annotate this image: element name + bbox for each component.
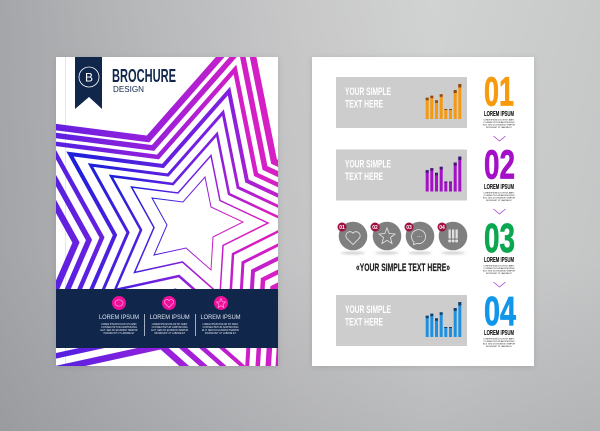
icon: speech bubble: 03 [406, 225, 412, 231]
column 2: CONSECTETUR ADIPISICING [152, 326, 188, 329]
icon row [338, 222, 467, 254]
icon: speech bubble [404, 222, 434, 250]
step 03: LOREM IPSUM [484, 257, 514, 264]
step 04: CONSECTETUR ADIPISICING [484, 340, 515, 343]
caption: «YOUR SIMPLE TEXT HERE» [356, 262, 450, 274]
step 04: LOREM IPSUM DOLOR SIT AMET, [484, 338, 515, 340]
card 4 with blue bar chart: YOUR SIMPLE [345, 304, 391, 316]
column 2: LOREM IPSUM DOLOR SIT AMET, [152, 323, 188, 326]
ribbon with B logo: B [85, 70, 93, 84]
step 03: ELIT, SED DO EIUSMOD TEMPOR [483, 270, 515, 272]
column 3: INCIDIDUNT UT LABORE ET [205, 332, 237, 335]
column 2: ELIT, SED DO EIUSMOD TEMPOR [151, 329, 188, 332]
ribbon with B logo [75, 57, 102, 109]
column 2: LOREM IPSUM [150, 315, 190, 321]
step 01: ELIT, SED DO EIUSMOD TEMPOR [483, 124, 515, 126]
column 3 [200, 296, 240, 335]
column 1: CONSECTETUR ADIPISICING [101, 326, 137, 329]
step 01 [483, 68, 515, 129]
step 02: 02 [484, 142, 515, 188]
icon: binders: 04 [439, 225, 445, 231]
step 03: 03 [484, 215, 515, 261]
card 1 with orange bar chart [336, 77, 467, 128]
step 03: CONSECTETUR ADIPISICING [484, 267, 515, 270]
step 04: ELIT, SED DO EIUSMOD TEMPOR [483, 344, 515, 346]
step 01: 01 [484, 68, 514, 114]
step 02: CONSECTETUR ADIPISICING [484, 194, 515, 197]
info band [56, 289, 278, 348]
card 2 with purple bar chart [336, 150, 467, 200]
column 1 [99, 296, 139, 335]
card 2 with purple bar chart: TEXT HERE [345, 171, 383, 183]
panel: inner page [312, 57, 534, 367]
step 04: LOREM IPSUM [484, 330, 514, 337]
card 4 with blue bar chart [336, 295, 467, 346]
icon: star: 02 [372, 225, 378, 231]
step 02: INCIDIDUNT UT LABORE ET [486, 199, 513, 202]
icon: speech bubble: ... [417, 233, 422, 239]
column 2 [150, 296, 190, 335]
column 1: INCIDIDUNT UT LABORE ET [104, 332, 135, 335]
step 02 [483, 142, 515, 202]
subheading: design: DESIGN [113, 85, 144, 94]
column 2: INCIDIDUNT UT LABORE ET [154, 332, 186, 335]
column 3: LOREM IPSUM DOLOR SIT AMET, [202, 323, 239, 326]
arrow 2 [494, 209, 506, 214]
column 1: LOREM IPSUM DOLOR SIT AMET, [101, 323, 137, 326]
star line pattern [56, 57, 278, 366]
step 01: CONSECTETUR ADIPISICING [484, 121, 515, 124]
column 3: ELIT, SED DO EIUSMOD TEMPOR [202, 329, 239, 332]
card 4 with blue bar chart: TEXT HERE [345, 316, 383, 328]
column 3: LOREM IPSUM [200, 315, 240, 321]
heading: brochure: BROCHURE [112, 66, 176, 86]
column 3: CONSECTETUR ADIPISICING [202, 326, 239, 329]
icon: heart: 01 [339, 225, 345, 231]
arrow 1 [494, 136, 506, 141]
card 1 with orange bar chart: YOUR SIMPLE [345, 86, 391, 98]
step 02: ELIT, SED DO EIUSMOD TEMPOR [483, 198, 515, 200]
panel: brochure cover [56, 56, 279, 368]
card 2 with purple bar chart: YOUR SIMPLE [345, 158, 391, 170]
column 1: ELIT, SED DO EIUSMOD TEMPOR [100, 329, 138, 332]
step 01: LOREM IPSUM [484, 111, 514, 118]
step 01: INCIDIDUNT UT LABORE ET [486, 126, 513, 129]
card 1 with orange bar chart: TEXT HERE [345, 98, 383, 110]
step 03 [483, 215, 515, 275]
step 04: INCIDIDUNT UT LABORE ET [486, 345, 513, 348]
step 04 [483, 288, 516, 348]
arrow 3 [494, 282, 506, 287]
step 03: INCIDIDUNT UT LABORE ET [486, 272, 513, 275]
column 1: LOREM IPSUM [99, 315, 139, 321]
step 03: LOREM IPSUM DOLOR SIT AMET, [484, 264, 515, 268]
step 04: 04 [484, 288, 516, 334]
step 02: LOREM IPSUM [484, 184, 514, 191]
step 01: LOREM IPSUM DOLOR SIT AMET, [484, 118, 515, 122]
step 02: LOREM IPSUM DOLOR SIT AMET, [484, 192, 515, 194]
